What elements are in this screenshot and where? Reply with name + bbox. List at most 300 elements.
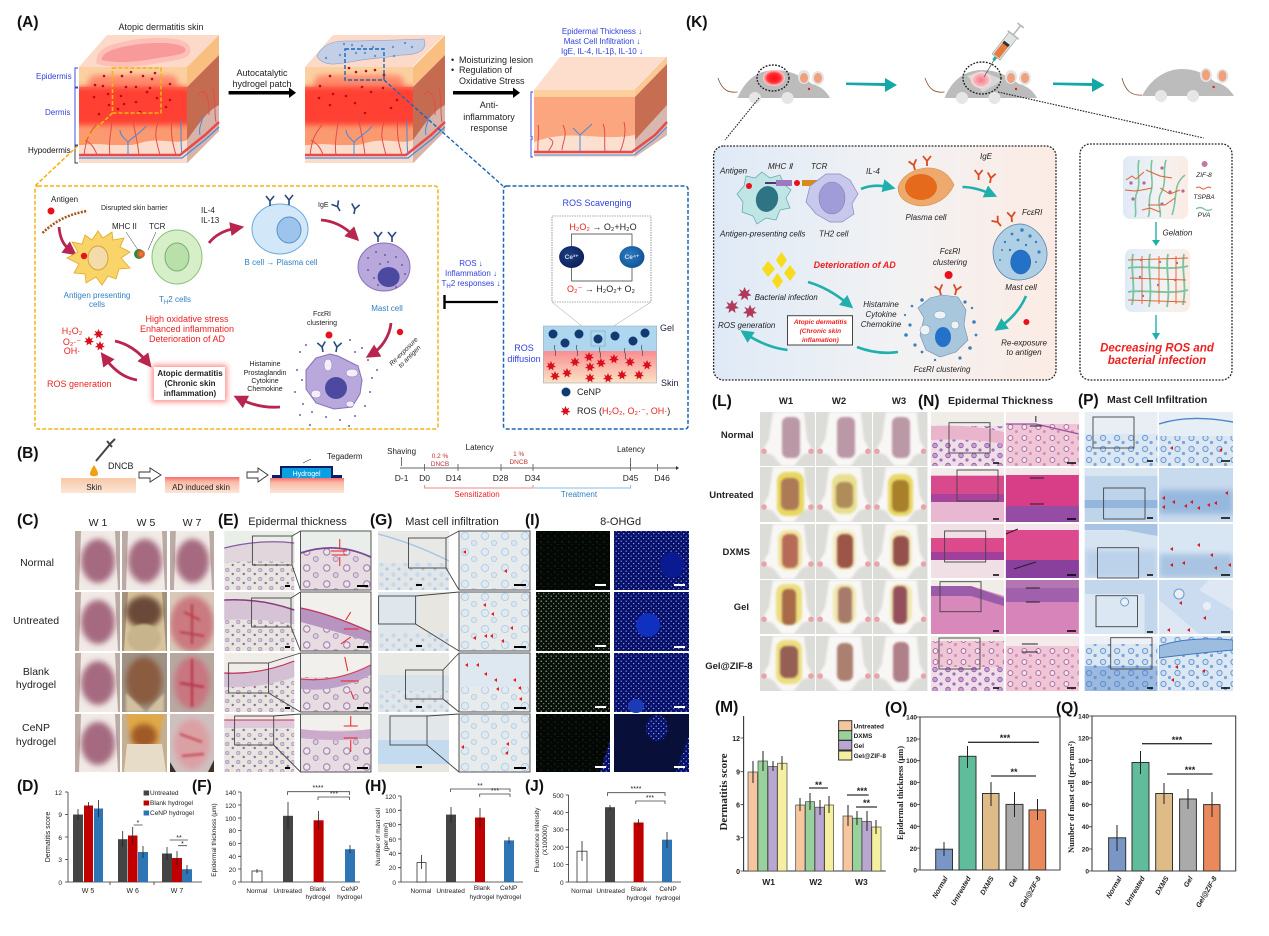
axes H: Blank <box>474 885 491 892</box>
treatment effect text and arrow: Moisturizing lesion <box>459 55 533 65</box>
panel label E and title: (E) <box>218 512 239 529</box>
MHC II and TCR receptors: TCR <box>811 162 828 171</box>
cube: atopic dermatitis skin: Atopic dermatitis skin <box>118 22 204 32</box>
panel K: hydrogel injection schematic <box>686 14 1234 380</box>
antigen and skin barrier <box>42 195 168 233</box>
arrow <box>846 78 897 92</box>
syringe <box>988 21 1026 64</box>
axes O: 140 <box>906 714 917 722</box>
plasma cell: Plasma cell <box>906 213 947 222</box>
legend CeNP and ROS: ROS (H₂O₂, O₂·⁻, OH·) <box>577 406 670 416</box>
mediators <box>240 361 287 407</box>
panel label F: (F) <box>192 778 212 795</box>
error bars and significance Q: *** <box>1172 735 1183 745</box>
axes O: 60 <box>910 802 917 809</box>
TH2 cell: T <box>159 295 164 304</box>
result text: Decreasing ROS and <box>1100 342 1215 354</box>
bacterial infection <box>755 252 848 304</box>
timeline: D46 <box>654 473 670 483</box>
timeline: Treatment <box>561 490 598 499</box>
column and row headings: W 7 <box>183 517 201 529</box>
result arrow <box>1152 315 1160 340</box>
panel label I and title <box>525 512 641 529</box>
yellow panel: AD immune cascade <box>35 186 438 429</box>
panel P: mast cell infiltration histology <box>1078 392 1233 691</box>
bars Q <box>1109 762 1220 871</box>
MHC II and TCR: TCR <box>149 222 166 231</box>
dotted panel: deterioration of AD <box>714 146 1056 380</box>
re-exposure to antigen: Re-exposure <box>388 336 420 368</box>
treatment effect text and arrow: Anti- <box>480 100 498 110</box>
gelation arrow: Gelation <box>1162 228 1193 238</box>
hydrogel with Tegaderm: Tegaderm <box>327 452 363 461</box>
panel label J: (J) <box>525 778 544 795</box>
panel label I and title: (I) <box>525 512 540 529</box>
atopic dermatitis box: Atopic dermatitis <box>157 369 223 378</box>
FcεRI clustering cell <box>294 311 378 427</box>
re-exposure <box>1000 296 1047 357</box>
axes J: Untreated <box>596 888 625 895</box>
axes J: 400 <box>553 810 564 817</box>
histology grid P <box>1085 412 1233 691</box>
atopic dermatitis box: (Chronic skin <box>164 379 216 388</box>
B cell to plasma cell <box>245 195 318 267</box>
re-exposure to antigen <box>372 323 423 370</box>
return arrows <box>746 334 898 353</box>
panel label N and title <box>918 393 1053 410</box>
deterioration text: High oxidative stress <box>145 314 229 324</box>
skin with DNCB syringe: DNCB <box>108 461 134 471</box>
IL-4 IL-13 with arrow: IL-13 <box>201 216 220 225</box>
panel label E and title <box>218 512 347 529</box>
axes O: Epidermal thickness (μm) <box>895 746 905 840</box>
bars J: *** <box>646 795 654 802</box>
histology grid E <box>224 531 371 772</box>
axes D <box>45 790 202 895</box>
photo grid L <box>760 412 928 691</box>
autocatalytic hydrogel patch arrow <box>229 68 296 98</box>
treatment effect text and arrow: Oxidative Stress <box>459 76 525 86</box>
axes F: 0 <box>232 880 236 887</box>
panel C: mouse photographs <box>13 512 214 772</box>
TH2 cell <box>806 174 858 238</box>
re-exposure to antigen: to antigen <box>397 344 423 370</box>
error bars and significance M: ** <box>815 780 822 790</box>
IgE and arrow <box>962 152 996 194</box>
panel B: experimental design <box>17 439 679 499</box>
timeline: Latency <box>466 443 494 452</box>
column and row headings: W 1 <box>89 517 107 529</box>
atopic dermatitis box: inflammation) <box>164 389 217 398</box>
panel label O: (O) <box>885 700 907 717</box>
skin layer labels <box>28 68 78 163</box>
inhibition marker <box>441 259 501 309</box>
AD induced skin <box>165 477 239 493</box>
axes J: 200 <box>553 845 564 852</box>
component legend: PVA <box>1198 212 1210 219</box>
bars O <box>936 756 1046 870</box>
antigen presenting cell <box>59 227 130 309</box>
FcεRI clustering cell: FcεRI <box>940 247 961 256</box>
headings L: Normal <box>721 430 754 441</box>
gel and skin diagram: ROS <box>514 343 534 353</box>
axes H: hydrogel <box>470 894 495 901</box>
skin layer labels: Epidermis <box>36 72 72 81</box>
legend D <box>144 790 195 817</box>
legend CeNP and ROS: CeNP <box>577 387 601 397</box>
gelation arrow <box>1152 222 1193 246</box>
treatment effect text and arrow: • <box>451 65 454 75</box>
axes H: CeNP <box>500 885 517 892</box>
ceria redox cycle: O₂⁻ → H₂O₂+ O₂ <box>567 284 635 294</box>
panel label M: (M) <box>715 699 738 716</box>
FcεRI clustering cell: clustering <box>307 320 337 327</box>
outcome text: IgE, IL-4, IL-1β, IL-10 ↓ <box>561 47 643 56</box>
panel H: mast cell bar chart <box>365 778 523 901</box>
axes Q: DXMS <box>1155 875 1171 897</box>
histology grid G <box>378 531 530 772</box>
timeline: D45 <box>623 473 639 483</box>
re-exposure: to antigen <box>1006 348 1042 357</box>
axes H: Untreated <box>436 888 465 895</box>
axes H: (per mm²) <box>383 823 390 851</box>
cube: healed skin <box>531 57 667 157</box>
axes M: W2 <box>809 877 822 887</box>
axes J: hydrogel <box>627 895 652 902</box>
skin layer labels: Dermis <box>45 108 70 117</box>
IL-4 IL-13 with arrow <box>201 206 237 243</box>
skin with DNCB syringe <box>61 439 136 493</box>
FcεRI clustering cell: FcεRI <box>313 311 331 318</box>
panel label C: (C) <box>17 512 39 529</box>
component legend: ZIF-8 <box>1195 172 1212 179</box>
blue panel: ROS scavenging: ROS Scavenging <box>562 198 632 208</box>
bars J: **** <box>631 786 642 793</box>
skin layer labels: Hypodermis <box>28 146 71 155</box>
axes O: 80 <box>910 780 917 787</box>
atopic dermatitis box: inflamation) <box>802 337 839 344</box>
treatment effect text and arrow: Regulation of <box>459 65 513 75</box>
timeline: D14 <box>446 473 462 483</box>
panel label D: (D) <box>17 778 39 795</box>
axes F: Untreated <box>273 888 302 895</box>
axes Q <box>1066 714 1236 909</box>
axes F: Epidermal thickness (μm) <box>211 803 218 877</box>
axes M: W3 <box>855 877 868 887</box>
panel label A: (A) <box>17 14 39 31</box>
panel M: dermatitis score bar chart <box>715 699 886 887</box>
antigen-presenting cell: Antigen <box>719 166 748 176</box>
bars F <box>252 785 355 882</box>
MHC II and TCR <box>112 222 166 259</box>
axes O: 120 <box>906 736 917 744</box>
deterioration text: Enhanced inflammation <box>140 324 234 334</box>
panel label K: (K) <box>686 14 708 31</box>
panel I: 8-OHGd immunofluorescence <box>525 512 689 772</box>
axes H: 120 <box>385 794 396 801</box>
axes M: W1 <box>762 877 775 887</box>
treatment effect text and arrow: inflammatory <box>463 112 515 122</box>
axes M: 3 <box>736 836 740 842</box>
TH2 cell: 2 cells <box>168 295 191 304</box>
IL-4 IL-13 with arrow: IL-4 <box>201 206 215 215</box>
axes J: 0 <box>560 880 564 887</box>
healed mouse <box>1122 68 1234 102</box>
error bars and significance Q: *** <box>1185 765 1196 775</box>
bars H <box>417 783 514 882</box>
axes F: 100 <box>225 816 236 823</box>
axes F: 140 <box>225 790 236 797</box>
axes O: 100 <box>906 758 917 765</box>
axes M: 0 <box>736 869 740 876</box>
cube: skin with hydrogel patch <box>300 35 445 163</box>
panel A: hydrogel schematic <box>17 14 688 429</box>
panel label Q: (Q) <box>1056 700 1078 717</box>
fluorescence grid <box>536 531 689 772</box>
column and row headings: W 5 <box>137 517 155 529</box>
outcome text: Mast Cell Infiltration ↓ <box>564 37 640 46</box>
IL-4 arrow <box>861 167 889 189</box>
mast cell <box>992 208 1047 292</box>
column and row headings: Normal <box>20 557 54 569</box>
headings L: W3 <box>892 396 906 407</box>
bars D: ** <box>176 835 182 842</box>
bars H: ** <box>477 783 483 790</box>
axes O: 0 <box>913 868 917 874</box>
mediators: Histamine <box>249 361 281 368</box>
axes Q: 100 <box>1078 758 1089 765</box>
antigen presenting cell: Antigen presenting <box>64 291 130 300</box>
mouse with hydrogel injection <box>925 60 1037 104</box>
axes D: 0 <box>58 880 62 887</box>
ROS generation: H₂O₂ <box>62 326 83 336</box>
axes O <box>895 714 1060 909</box>
crosslinked network <box>1125 249 1190 312</box>
autocatalytic hydrogel patch arrow: Autocatalytic <box>236 68 288 78</box>
error bars and significance M: *** <box>857 786 868 796</box>
error bars and significance M <box>753 751 877 834</box>
timeline: Latency <box>617 445 645 454</box>
IgE <box>318 200 360 236</box>
axes J: 100 <box>553 862 564 869</box>
treatment effect text and arrow: • <box>451 55 454 65</box>
axes F: CeNP <box>341 886 358 893</box>
MHC II and TCR: MHC II <box>112 222 137 231</box>
axes H: Number of mast cell <box>375 808 382 866</box>
panel F: epidermal thickness bar chart <box>192 778 363 901</box>
panel label P and title: (P) <box>1078 392 1099 409</box>
panel D: dermatitis score bar chart <box>17 778 202 895</box>
result text <box>1100 342 1215 367</box>
mediators: Chemokine <box>247 386 283 393</box>
outcome text: Epidermal Thickness ↓ <box>562 27 642 36</box>
panel label N and title: Epidermal Thickness <box>948 395 1053 407</box>
axes O: 20 <box>910 846 917 853</box>
component legend <box>1193 161 1215 219</box>
mast cell: Mast cell <box>1005 283 1037 292</box>
ROS generation: ROS generation <box>718 321 776 330</box>
headings L: Gel <box>734 602 749 613</box>
legend CeNP and ROS <box>560 387 670 416</box>
axes Q: Gel@ZIF-8 <box>1195 875 1219 909</box>
step arrow <box>247 468 268 482</box>
axes Q: 60 <box>1082 802 1089 809</box>
legend M: Untreated <box>854 724 884 730</box>
axes Q: Number of mast cell (per mm²) <box>1066 741 1076 853</box>
panel Q: mast cell bar chart <box>1056 700 1236 909</box>
axes M: 9 <box>736 770 740 776</box>
error bars and significance O <box>944 733 1039 856</box>
TH2 cell: H <box>164 300 168 306</box>
timeline: D0 <box>419 473 430 483</box>
blue dashed selection <box>345 49 503 186</box>
bars J <box>577 786 672 882</box>
treatment effect text and arrow: response <box>470 123 508 133</box>
axes O: Normal <box>932 875 950 900</box>
panel label H: (H) <box>365 778 387 795</box>
mediators: Chemokine <box>861 320 902 329</box>
ROS generation <box>718 287 776 330</box>
axes F: 60 <box>229 841 236 848</box>
column and row headings: Untreated <box>13 615 59 627</box>
IgE and arrow: IgE <box>980 152 993 161</box>
headings L <box>705 396 906 672</box>
dotted panel: gelation <box>1080 144 1232 380</box>
axes D: 12 <box>55 790 62 797</box>
IL-4 arrow: IL-4 <box>866 167 880 176</box>
timeline: Shaving <box>387 447 416 456</box>
gel and skin diagram: diffusion <box>507 354 541 364</box>
error bars and significance M: ** <box>863 798 870 808</box>
axes F: Normal <box>246 888 268 895</box>
bars F: *** <box>330 791 338 798</box>
axes O: Untreated <box>950 875 973 907</box>
TH2 cell: TH2 cell <box>819 230 849 238</box>
MHC II and TCR receptors: MHC Ⅱ <box>768 162 793 171</box>
axes H: 60 <box>389 837 396 844</box>
legend M <box>839 721 886 760</box>
axes M: 6 <box>736 802 740 810</box>
panel O: epidermal thickness bar chart <box>885 700 1060 909</box>
mouse with lesion <box>718 65 830 104</box>
panel label L: (L) <box>712 393 732 410</box>
ceria redox cycle: H₂O₂ → O₂+H₂O <box>569 222 637 232</box>
panel label G and title: (G) <box>370 512 392 529</box>
panel label G and title <box>370 512 499 529</box>
axes F: 20 <box>229 867 236 874</box>
atopic dermatitis box: Atopic dermatitis <box>793 319 847 326</box>
pre-gel network <box>1123 156 1188 219</box>
axes M: Dermatitis score <box>718 753 730 831</box>
axes F: hydrogel <box>337 894 363 901</box>
axes O: Gel <box>1008 875 1020 889</box>
axes M: 12 <box>732 736 740 743</box>
mediators: Prostaglandin <box>244 370 287 377</box>
legend M: Gel <box>854 743 864 750</box>
bacterial infection: Bacterial infection <box>755 293 818 302</box>
axes D: 9 <box>58 812 62 819</box>
axes F: Blank <box>310 886 327 893</box>
axes D: 6 <box>58 835 62 842</box>
mediators: Cytokine <box>865 310 897 319</box>
axes D: W 6 <box>126 888 139 895</box>
ROS generation: OH· <box>64 346 80 356</box>
timeline: D28 <box>493 473 509 483</box>
result text: bacterial infection <box>1108 355 1206 367</box>
panel label N and title: (N) <box>918 393 940 410</box>
FcεRI clustering cell: FcεRI clustering <box>914 365 971 374</box>
ceria redox cycle: Ce⁴⁺ <box>625 254 640 261</box>
inhibition marker: Inflammation ↓ <box>445 269 497 278</box>
bars D <box>73 800 192 882</box>
axes H: 20 <box>389 865 396 872</box>
re-exposure: Re-exposure <box>1001 338 1047 348</box>
step arrow <box>139 468 161 482</box>
error bars and significance O: *** <box>1000 733 1011 743</box>
axes D: Dermatitis score <box>45 812 52 862</box>
FcεRI clustering cell <box>904 247 977 374</box>
timeline: D-1 <box>395 473 409 483</box>
skin with DNCB syringe: Skin <box>86 483 102 492</box>
axes H: 100 <box>385 808 396 815</box>
axes H: hydrogel <box>496 894 522 901</box>
column and row headings: hydrogel <box>16 679 56 691</box>
axes H <box>375 794 523 901</box>
axes D: W 7 <box>171 888 183 895</box>
antigen and skin barrier: Disrupted skin barrier <box>101 205 168 212</box>
panel label E and title: Epidermal thickness <box>248 516 347 528</box>
treatment effect text and arrow <box>451 55 533 133</box>
timeline <box>387 443 679 499</box>
panel J: fluorescence intensity bar chart <box>525 778 681 902</box>
deterioration text <box>140 314 234 344</box>
TH2 cell <box>152 230 202 306</box>
axes J: Normal <box>571 888 593 895</box>
mast cell <box>358 232 410 313</box>
component legend: TSPBA <box>1193 194 1215 201</box>
legend M: Gel@ZIF-8 <box>854 753 886 760</box>
axes Q: 120 <box>1078 736 1089 742</box>
panel label G and title: Mast cell infiltration <box>405 516 499 528</box>
panel E: epidermal thickness histology <box>218 512 371 772</box>
timeline: 1 % <box>513 451 525 458</box>
deterioration heading: Deterioration of AD <box>814 260 896 270</box>
axes F: 80 <box>229 828 236 835</box>
headings L: Gel@ZIF-8 <box>705 661 752 672</box>
column and row headings: hydrogel <box>16 736 56 748</box>
ceria redox cycle <box>552 216 651 302</box>
legend D: CeNP hydrogel <box>150 810 195 817</box>
axes J: (X100000) <box>542 825 549 855</box>
inhibition marker: ROS ↓ <box>459 259 483 268</box>
outcome text <box>561 27 643 56</box>
ROS generation <box>47 326 147 389</box>
B cell to plasma cell: B cell → Plasma cell <box>245 258 318 267</box>
error bars and significance O: ** <box>1010 767 1018 777</box>
inhibition marker: H <box>446 284 451 290</box>
gel and skin diagram: Skin <box>661 378 679 388</box>
ROS generation: O₂·⁻ <box>63 337 81 347</box>
mediators: Cytokine <box>251 378 279 385</box>
column and row headings: Blank <box>23 666 50 678</box>
axes F <box>211 790 363 901</box>
hydrogel with Tegaderm <box>270 452 363 493</box>
axes Q: 140 <box>1078 714 1089 720</box>
cube: atopic dermatitis skin <box>74 22 219 163</box>
legend M: DXMS <box>854 733 873 740</box>
axes J: 500 <box>553 793 564 800</box>
axes D: W 5 <box>82 888 94 895</box>
